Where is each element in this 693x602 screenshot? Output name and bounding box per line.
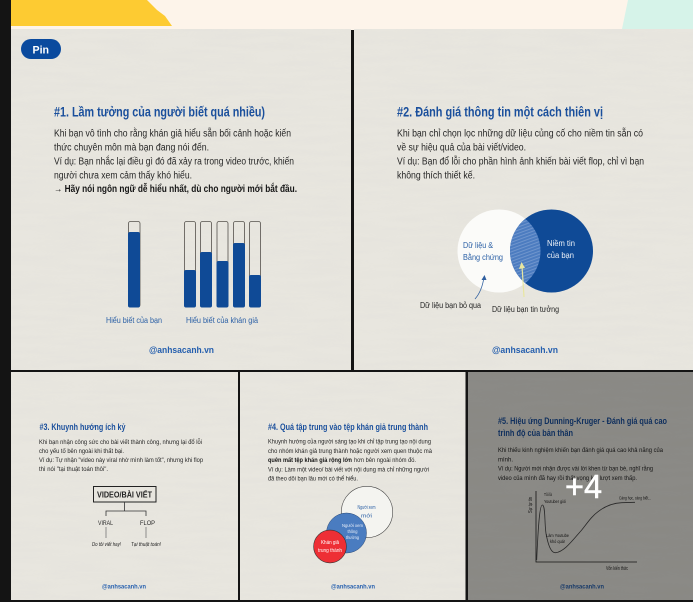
venn diagram: của bạn xyxy=(547,250,574,260)
heading 3: #3. Khuynh hướng ích kỷ xyxy=(40,422,126,432)
body text 2 xyxy=(397,126,644,182)
line chart: dunning-kruger curve: khó quá! xyxy=(550,539,565,544)
handle 4: @anhsacanh.vn xyxy=(331,584,375,590)
heading 1: #1. Lầm tưởng của người biết quá nhiều) xyxy=(54,104,265,120)
pin badge: Pin xyxy=(32,44,49,56)
nested circles: audience groups: thường xyxy=(346,535,359,541)
more photos counter: +4 xyxy=(565,468,602,505)
line chart: dunning-kruger curve xyxy=(528,491,651,572)
arrow: ignored data: Dữ liệu bạn bỏ qua xyxy=(420,301,481,310)
body text 2: không thích thiết kế. xyxy=(397,170,475,182)
bar chart: your knowledge xyxy=(106,222,162,325)
venn diagram: Niềm tin xyxy=(547,238,575,248)
nested circles: audience groups xyxy=(314,486,393,563)
body text 5: Khi thiếu kinh nghiệm khiến bạn đánh giá quá cao khả năng của xyxy=(498,445,663,454)
venn diagram: Dữ liệu & xyxy=(463,240,493,250)
venn diagram xyxy=(458,210,593,292)
body text 3: cho yếu tố bên ngoài khi thất bại. xyxy=(39,446,124,455)
body text 4: quên mất tệp khán giả rộng lớn xyxy=(268,456,352,464)
nested circles: audience groups: Người xem xyxy=(358,505,376,511)
heading 5: trình độ của bản thân xyxy=(498,428,573,438)
body text 1 xyxy=(54,126,297,195)
handle 2: @anhsacanh.vn xyxy=(492,345,558,356)
panel: #2 confirmation bias xyxy=(354,29,693,370)
body text 3: Ví dụ: Tự nhận "video này viral nhờ mình làm tốt", nhưng khi flop xyxy=(39,455,203,464)
line chart: dunning-kruger curve: Làm Youtube xyxy=(546,533,569,538)
nested circles: audience groups: thông xyxy=(348,529,358,535)
nested circles: audience groups: trung thành xyxy=(318,548,342,554)
body text 2: Khi bạn chỉ chọn lọc những dữ liệu củng cố cho niềm tin sẵn có xyxy=(397,126,643,140)
body text 3 xyxy=(39,437,203,473)
body text 3: thì nói "tại thuật toán thôi". xyxy=(39,466,108,473)
panel: #4 loyal audience xyxy=(240,372,466,600)
body text 2: về sự hiệu quả của bài viết/video. xyxy=(397,142,526,154)
flow diagram: video outcome xyxy=(92,486,162,548)
bar chart: audience knowledge xyxy=(184,222,261,325)
body text 4: Ví dụ: Làm một video/ bài viết với nội dung mà chỉ những người xyxy=(268,464,429,474)
handle 5: @anhsacanh.vn xyxy=(560,584,604,590)
bar chart: your knowledge: Hiểu biết của bạn xyxy=(106,316,162,325)
body text 1: người chưa xem cảm thấy khó hiểu. xyxy=(54,170,192,182)
flow diagram: video outcome: Tại thuật toán! xyxy=(131,542,162,548)
body text 4: Khuynh hướng của người sáng tạo khi chỉ tập trung tạo nội dung xyxy=(268,438,431,446)
panel: #5 dunning-kruger xyxy=(468,372,693,600)
line chart: dunning-kruger curve: Vốn kiến thức xyxy=(606,566,628,572)
nested circles: audience groups: Người xem xyxy=(342,523,363,529)
line chart: dunning-kruger curve: Youtuber giỏi xyxy=(544,498,566,504)
body text 4: hơn bên ngoài nhóm đó. xyxy=(354,457,416,464)
flow diagram: video outcome: VIDEO/BÀI VIẾT xyxy=(97,490,153,500)
arrow: trusted data: Dữ liệu bạn tin tưởng xyxy=(492,305,559,314)
bar chart: audience knowledge: Hiểu biết của khán giả xyxy=(186,316,258,325)
arrow: ignored data xyxy=(420,275,486,310)
line chart: dunning-kruger curve: Càng học, càng biết... xyxy=(619,496,651,500)
body text 3: Khi bạn nhận công sức cho bài viết thành công, nhưng lại đổ lỗi xyxy=(39,437,202,446)
body text 5: video của mình đã hay rồi thất vọng khi lượt xem thấp. xyxy=(498,473,637,482)
panel: #1 curse of knowledge xyxy=(11,29,351,370)
pin badge xyxy=(21,39,61,59)
venn diagram: Bằng chứng xyxy=(463,252,503,262)
heading 2: #2. Đánh giá thông tin một cách thiên vị xyxy=(397,104,603,120)
body text 4: cho nhóm khán giả trung thành hoặc người xem quen thuộc mà xyxy=(268,448,432,455)
line chart: dunning-kruger curve: Tôi là xyxy=(544,492,552,497)
flow diagram: video outcome: VIRAL xyxy=(98,520,113,527)
body text 5: mình. xyxy=(498,456,513,464)
handle 1: @anhsacanh.vn xyxy=(149,345,214,356)
body text 4 xyxy=(268,438,432,482)
panel: #3 self-serving bias xyxy=(11,372,238,600)
heading 5 xyxy=(498,416,668,438)
nested circles: audience groups: mới xyxy=(361,514,372,520)
body text 1: → Hãy nói ngôn ngữ dễ hiểu nhất, dù cho người mới bắt đầu. xyxy=(54,182,297,195)
dark overlay xyxy=(468,372,693,600)
body text 1: thức chuyên môn mà bạn đang nói đến. xyxy=(54,142,209,154)
body text 4: đã theo dõi bạn lâu mới có thể hiểu. xyxy=(268,474,358,482)
handle 3: @anhsacanh.vn xyxy=(102,584,146,590)
body text 2: Ví dụ: Bạn đổ lỗi cho phần hình ảnh khiến bài viết flop, chỉ vì bạn xyxy=(397,154,644,168)
body text 5: Ví dụ: Người mới nhận được vài lời khen từ bạn bè, nghĩ rằng xyxy=(498,464,653,472)
body text 1: Khi bạn vô tình cho rằng khán giả hiểu sẵn bối cảnh hoặc kiến xyxy=(54,126,291,140)
body text 5 xyxy=(498,445,663,482)
arrow: trusted data xyxy=(492,262,559,314)
heading 4: #4. Quá tập trung vào tệp khán giả trung thành xyxy=(268,422,428,432)
flow diagram: video outcome: Do tôi viết hay! xyxy=(92,541,122,548)
nested circles: audience groups: Khán giả xyxy=(321,540,340,546)
body text 1: Ví dụ: Bạn nhắc lại điều gì đó đã xảy ra trong video trước, khiến xyxy=(54,154,294,168)
flow diagram: video outcome: FLOP xyxy=(140,520,155,527)
top decorative band xyxy=(11,0,693,30)
line chart: dunning-kruger curve: Sự tự tin xyxy=(528,497,534,513)
